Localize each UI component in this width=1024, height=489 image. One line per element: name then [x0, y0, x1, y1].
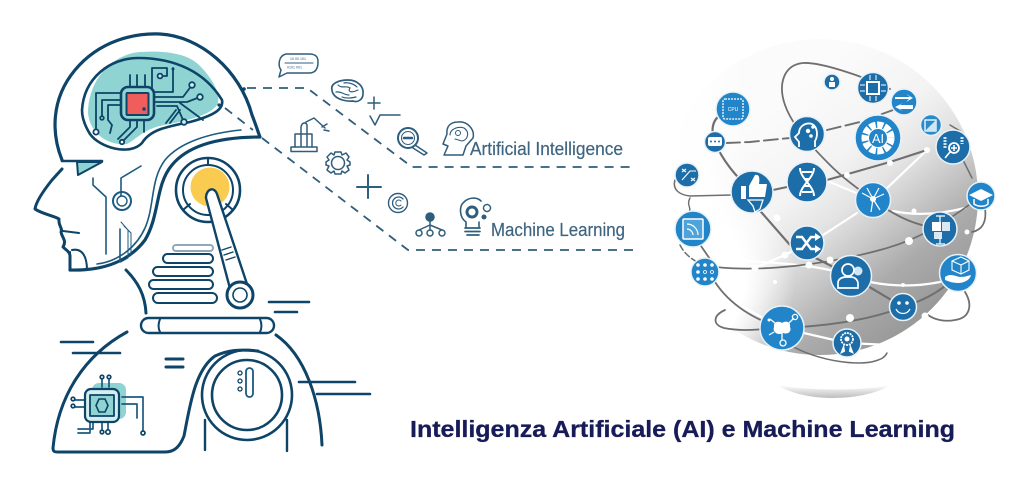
gray network lines — [674, 63, 985, 363]
node: CPU — [716, 92, 750, 126]
globe lower-left fade — [709, 229, 786, 346]
node: molecular hub — [856, 182, 890, 218]
cheek panel lines — [93, 166, 141, 262]
neck curve — [126, 270, 146, 313]
node: head with nodes — [790, 116, 824, 152]
white network lines — [690, 150, 965, 345]
title: Intelligenza Artificiale (AI) e Machine Learning — [410, 416, 955, 442]
icon: large plus — [357, 175, 381, 198]
icon: robot arm — [291, 118, 329, 152]
cheek dial — [113, 192, 131, 210]
node: CPU: CPU — [728, 107, 739, 113]
icon: tree network — [416, 213, 445, 236]
icon: gear bulb — [460, 198, 490, 235]
globe left fade — [655, 35, 745, 360]
node: magnifier board — [936, 130, 970, 164]
node: dots grid — [691, 258, 719, 286]
node: packages — [923, 212, 957, 246]
teal brain blob — [88, 52, 218, 144]
icon: speech bubble — [279, 54, 318, 77]
icon: concentric rings — [388, 194, 408, 212]
speed lines — [61, 302, 370, 394]
node: image square — [920, 114, 942, 136]
torso chip — [71, 375, 145, 435]
helmet inner line — [97, 130, 241, 264]
globe — [674, 61, 996, 398]
icon: speech bubble: 10 00 101 — [290, 57, 306, 61]
node: AI — [855, 115, 901, 161]
yellow shoulder dial — [176, 158, 240, 222]
globe floor shadow — [777, 385, 891, 398]
network nodes with icons — [675, 72, 995, 357]
node: chip — [858, 72, 888, 104]
dashed connector to Artificial Intelligence — [247, 88, 636, 167]
icon: magnifier — [398, 128, 427, 155]
node: AI: AI — [872, 131, 884, 146]
node: people — [830, 256, 872, 296]
node: arrows — [891, 89, 917, 115]
node: shuffle — [790, 226, 824, 260]
cheek vents — [121, 222, 131, 262]
node: decision — [675, 163, 699, 187]
icon row: Artificial Intelligence — [279, 54, 490, 236]
shoulder socket — [202, 350, 292, 451]
icon: speech bubble: 0101 001 — [287, 66, 302, 70]
node: smiley — [890, 294, 916, 320]
robot head and body illustration — [35, 34, 370, 452]
node: robot — [824, 74, 840, 90]
mouth and jaw details — [63, 231, 87, 270]
icon: brain — [332, 80, 363, 102]
node: thumbs — [731, 171, 773, 213]
dashed connector to Machine Learning — [225, 108, 636, 250]
piston arm — [206, 189, 253, 308]
network junction dots — [752, 147, 970, 322]
node: chat — [704, 132, 726, 152]
processor chip and circuit traces — [93, 68, 203, 144]
node: cloud network — [760, 306, 804, 350]
node: medal — [833, 329, 861, 357]
icon: plus and root — [368, 97, 400, 125]
node: hand with box — [940, 254, 976, 292]
collar band — [141, 318, 274, 333]
helmet outline — [55, 34, 260, 270]
node: DNA — [787, 162, 827, 202]
visor — [77, 162, 102, 175]
icon: AI head — [443, 122, 473, 155]
neck slats — [149, 245, 217, 303]
node: graduation cap — [967, 182, 995, 210]
icon: gear — [326, 152, 350, 174]
globe sphere — [662, 39, 978, 355]
torso outline — [53, 332, 322, 452]
node: wireless panel — [675, 211, 711, 247]
label: Artificial Intelligence: Artificial Intelligence — [470, 139, 623, 159]
equals mark — [166, 359, 183, 367]
face profile — [35, 169, 70, 270]
label: Machine Learning: Machine Learning — [491, 220, 625, 240]
brain outline — [82, 58, 222, 150]
